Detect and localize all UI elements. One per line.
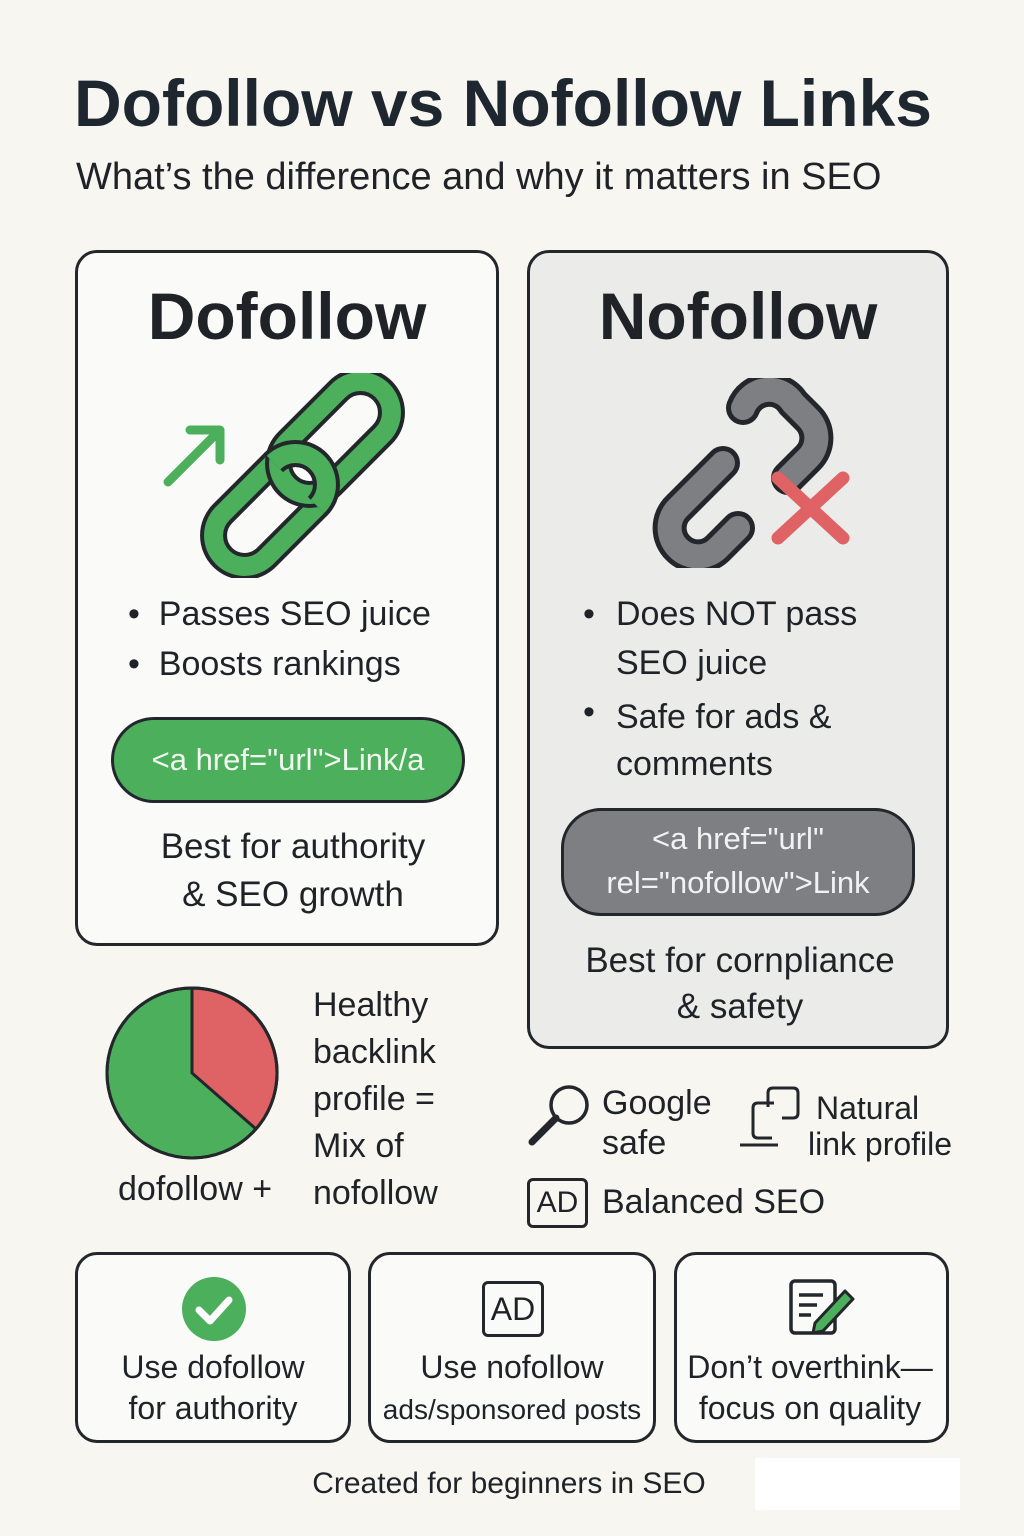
card: don't overthink (674, 1252, 949, 1443)
icon: natural link (740, 1086, 800, 1146)
panel: nofollow: Does NOT pass (616, 595, 857, 633)
code pill: nofollow (561, 808, 915, 916)
heading: dofollow: Dofollow (148, 279, 426, 353)
code pill: nofollow: rel="nofollow">Link (606, 865, 870, 900)
text: healthy backlink profile (313, 986, 438, 1212)
heading: nofollow: Nofollow (599, 279, 877, 353)
card: use dofollow (75, 1252, 351, 1443)
text: focus on quality (699, 1390, 921, 1426)
code pill: nofollow: <a href="url" (652, 821, 824, 856)
text: ads/sponsored posts (383, 1394, 641, 1425)
pie chart (106, 986, 279, 1160)
text (687, 1349, 933, 1426)
text: natural link profile (808, 1090, 952, 1162)
caption: dofollow (161, 827, 426, 914)
text: google safe: safe (602, 1124, 666, 1162)
bullets: dofollow: • Boosts rankings (128, 645, 401, 683)
code pill: dofollow (111, 717, 465, 803)
text: healthy backlink profile: Healthy (313, 986, 428, 1024)
icon: document with pencil (789, 1279, 855, 1335)
text: healthy backlink profile: Mix of (313, 1127, 404, 1165)
icon: broken grey chain with red x (652, 378, 850, 568)
text: google safe: Google (602, 1084, 712, 1122)
icon: green chain with arrow (164, 373, 405, 578)
text: dofollow +: dofollow + (118, 1170, 272, 1208)
title: Dofollow vs Nofollow Links (74, 66, 932, 140)
icon: AD box (527, 1178, 588, 1228)
icon: AD box: AD (537, 1186, 578, 1219)
caption: nofollow: & safety (677, 987, 803, 1026)
subtitle: What’s the difference and why it matters in SEO (76, 156, 881, 198)
card: use nofollow (368, 1252, 656, 1443)
caption: dofollow: Best for authority (161, 827, 425, 866)
panel: dofollow (75, 250, 499, 946)
text: google safe (602, 1084, 712, 1162)
text (383, 1349, 641, 1425)
bullets: nofollow: • (583, 595, 595, 633)
text: healthy backlink profile: profile = (313, 1080, 435, 1118)
text (121, 1349, 305, 1426)
text: Don’t overthink— (687, 1349, 933, 1385)
footer: Created for beginners in SEO (312, 1467, 706, 1500)
icon: AD (482, 1281, 544, 1337)
icon: AD: AD (491, 1291, 535, 1327)
text: for authority (129, 1390, 297, 1426)
panel: nofollow: comments (616, 745, 773, 783)
caption: nofollow (585, 941, 895, 1026)
text: healthy backlink profile: nofollow (313, 1174, 438, 1212)
text: natural link profile: link profile (808, 1126, 952, 1162)
code pill: dofollow: <a href="url">Link/a (152, 742, 424, 777)
bullets: dofollow (128, 595, 431, 683)
text: natural link profile: Natural (816, 1090, 919, 1126)
caption: dofollow: & SEO growth (182, 875, 404, 914)
caption: nofollow: Best for cornpliance (585, 941, 895, 980)
text: Use dofollow (121, 1349, 305, 1385)
panel: nofollow (527, 250, 949, 1049)
text: healthy backlink profile: backlink (313, 1033, 436, 1071)
panel: nofollow: SEO juice (616, 644, 767, 682)
icon: green check (182, 1277, 246, 1341)
bullets: nofollow: • (583, 693, 595, 731)
text: balanced SEO: Balanced SEO (602, 1183, 825, 1221)
bullets: nofollow (583, 595, 595, 731)
panel: nofollow: Safe for ads & (616, 698, 831, 736)
bullets: dofollow: • Passes SEO juice (128, 595, 431, 633)
text: Use nofollow (420, 1349, 604, 1385)
icon: magnifier (528, 1085, 589, 1146)
